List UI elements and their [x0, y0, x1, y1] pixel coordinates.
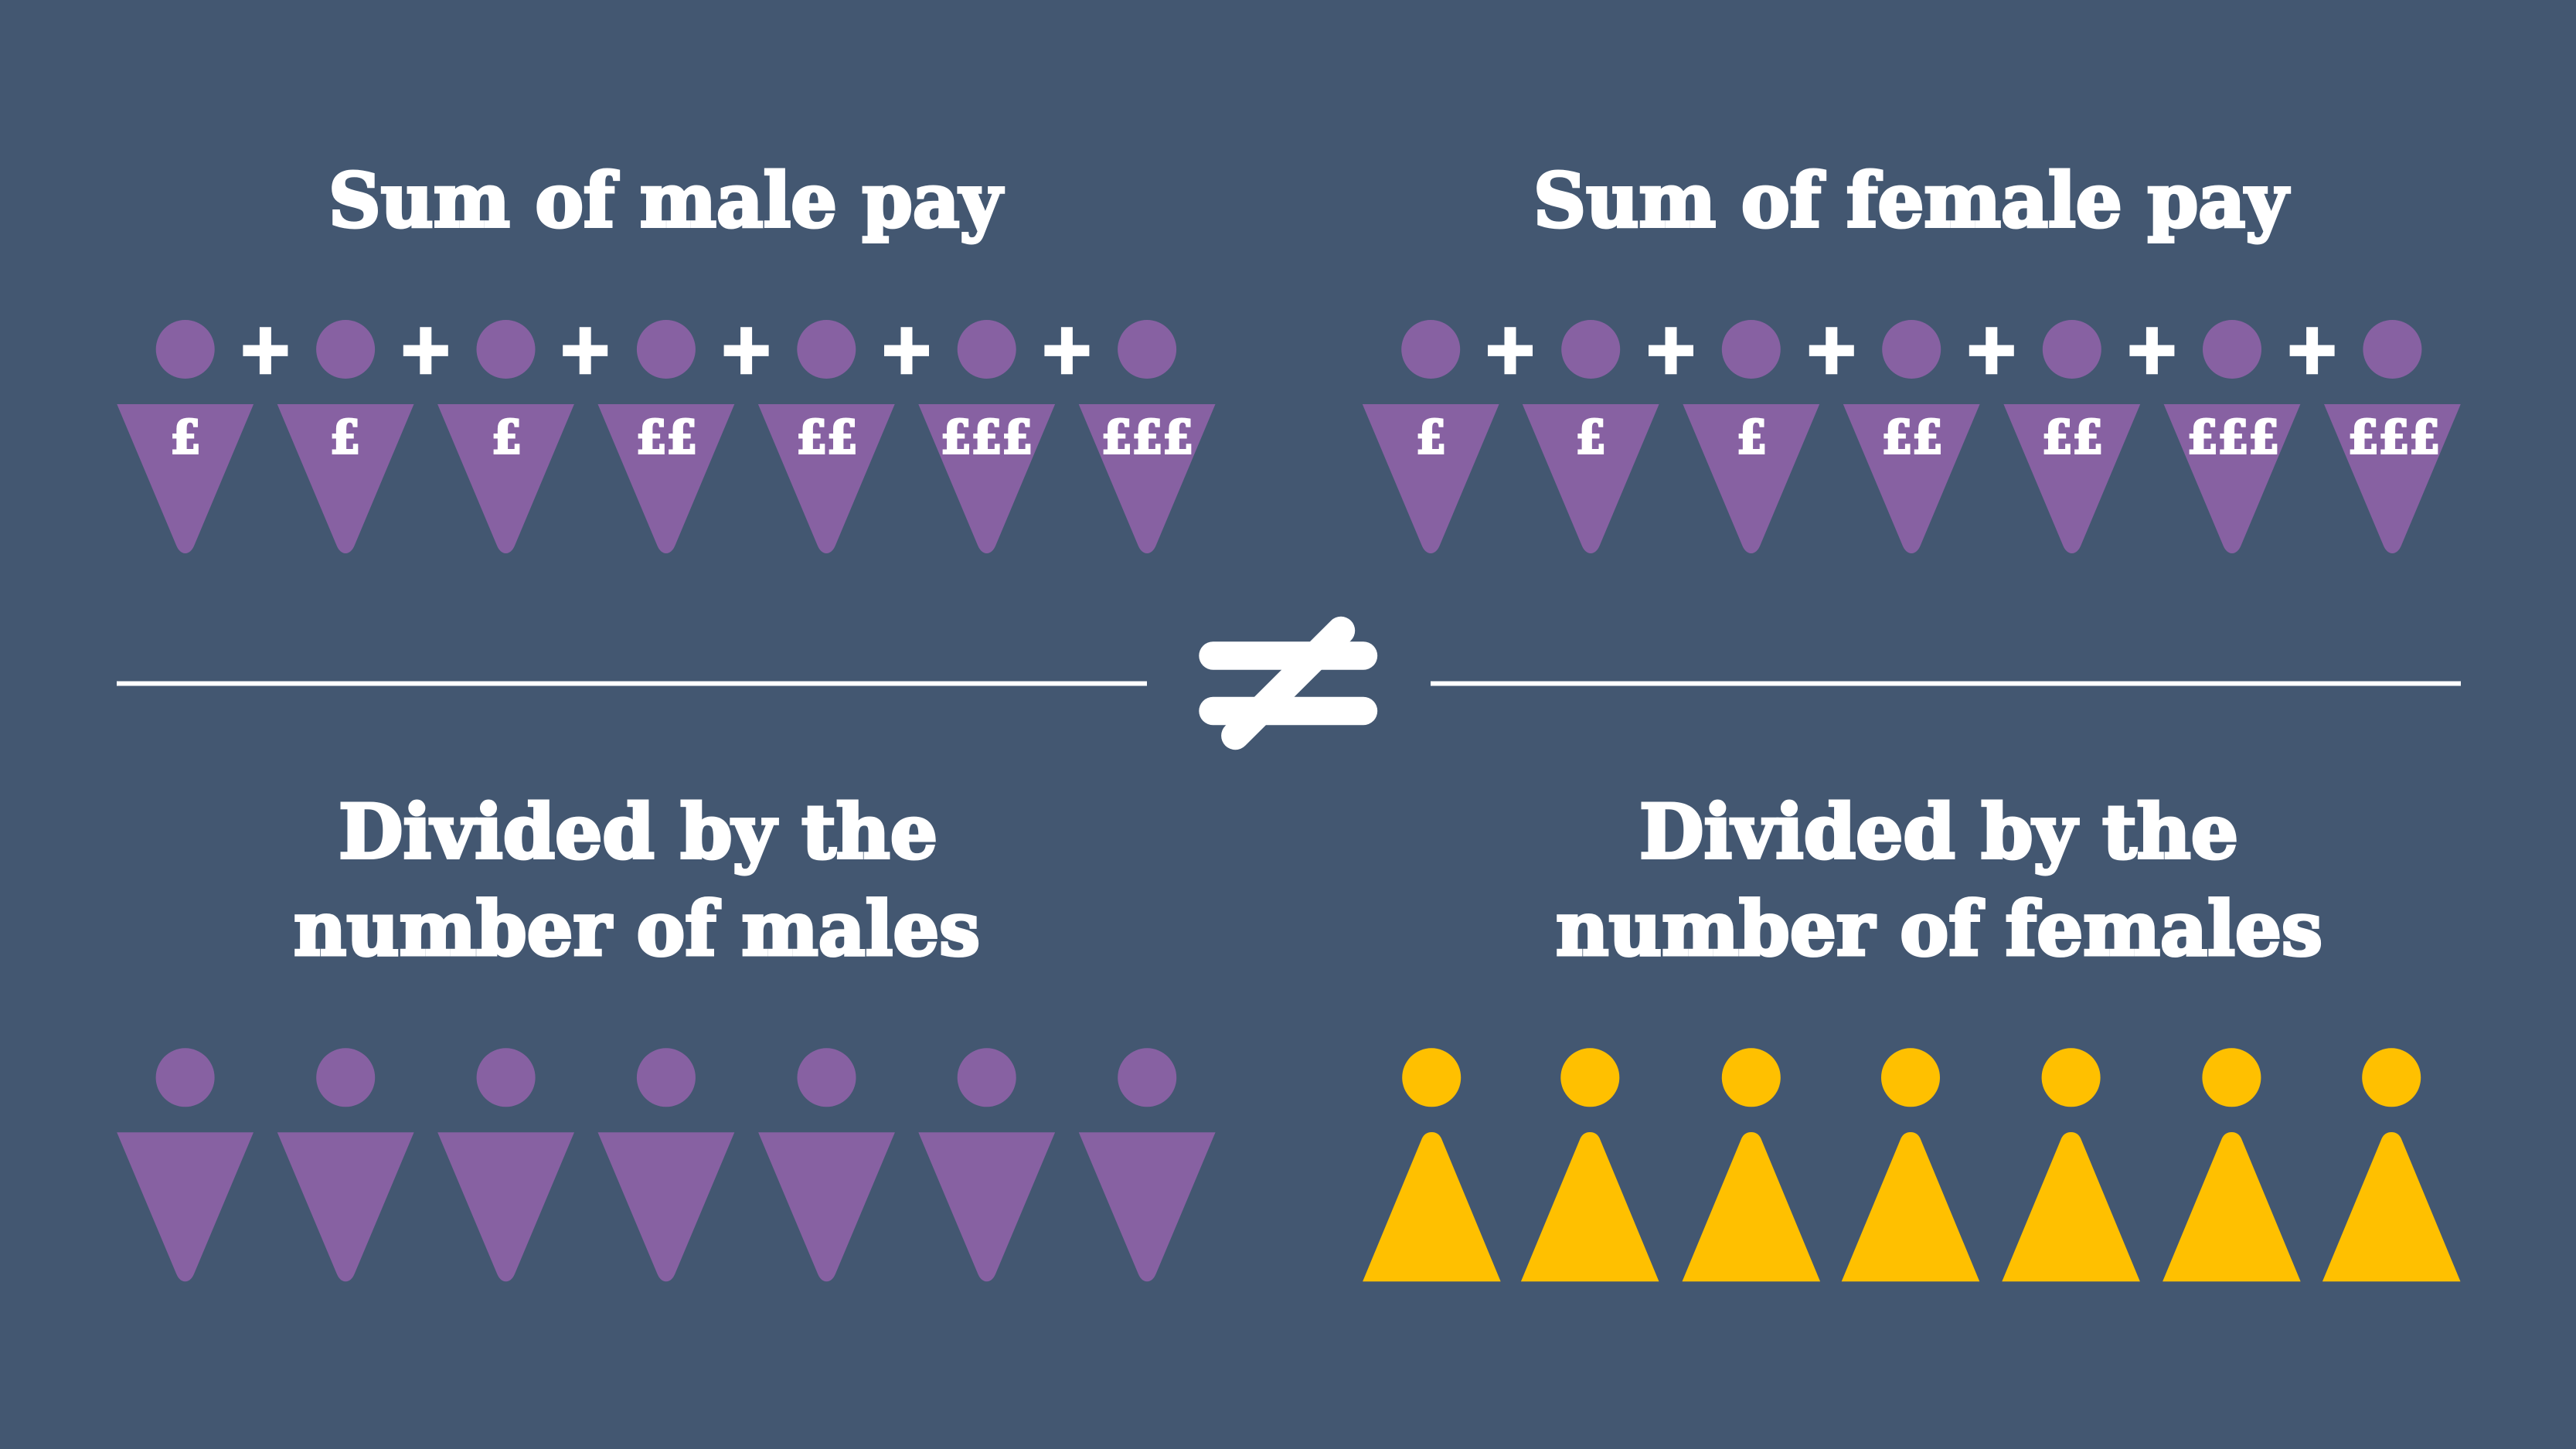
plus sign: [243, 327, 288, 374]
female pay figure 5 with ££: [2003, 320, 2140, 553]
panel: male count figures: [117, 1048, 1216, 1281]
heading: divided by the number of females: number of females: [1556, 886, 2322, 972]
plus sign: [1649, 327, 1693, 374]
female figure 7: [2322, 1048, 2461, 1281]
plus sign: [1969, 327, 2014, 374]
panel: female pay figures: [1363, 320, 2461, 553]
plus sign: [884, 327, 929, 374]
female pay figure 6 with £££: [2164, 320, 2300, 553]
female pay figure 1 with £: [1363, 320, 1499, 553]
heading: divided by the number of males: [294, 788, 980, 972]
heading: divided by the number of males: Divided by the: [339, 788, 938, 876]
plus sign: [2129, 327, 2174, 374]
female pay figure 2 with £: [1523, 320, 1659, 553]
female pay figure 5 with ££: ££: [2042, 411, 2103, 465]
plus sign: [724, 327, 769, 374]
divider left: [117, 682, 1147, 686]
male figure 5 with ££: ££: [796, 411, 858, 465]
male figure 6 with £££: £££: [941, 411, 1033, 465]
male figure 4 with ££: ££: [636, 411, 697, 465]
heading: divided by the number of females: Divided by the: [1639, 788, 2238, 876]
male figure 2: [277, 1048, 414, 1281]
female figure 4: [1842, 1048, 1979, 1281]
plus sign: [1044, 327, 1089, 374]
female pay figure 3 with £: £: [1737, 411, 1767, 465]
male figure 5: [758, 1048, 895, 1281]
male figure 7: [1079, 1048, 1216, 1281]
heading: sum of female pay: Sum of female pay: [1533, 157, 2290, 244]
female pay figure 2 with £: £: [1576, 411, 1606, 465]
heading: divided by the number of males: number of males: [294, 886, 980, 972]
female figure 1: [1363, 1048, 1501, 1281]
male figure 4 with ££: [598, 320, 734, 553]
male figure 2 with £: £: [330, 411, 360, 465]
male figure 7 with £££: £££: [1101, 411, 1193, 465]
heading: sum of male pay: Sum of male pay: [328, 157, 1004, 244]
male figure 3: [437, 1048, 574, 1281]
male figure 2 with £: [277, 320, 414, 553]
female pay figure 1 with £: £: [1416, 411, 1446, 465]
icon: not equal sign: [1213, 631, 1363, 736]
divider right: [1431, 682, 2461, 686]
female pay figure 4 with ££: ££: [1882, 411, 1943, 465]
female figure 2: [1521, 1048, 1659, 1281]
male figure 6 with £££: [918, 320, 1055, 553]
female pay figure 6 with £££: £££: [2187, 411, 2279, 465]
female figure 3: [1682, 1048, 1820, 1281]
plus sign: [2290, 327, 2335, 374]
panel: male pay figures: [117, 320, 1215, 553]
female figure 6: [2163, 1048, 2301, 1281]
male figure 5 with ££: [758, 320, 895, 553]
male figure 1 with £: £: [170, 411, 201, 465]
male figure 1: [117, 1048, 254, 1281]
male figure 3 with £: £: [492, 411, 522, 465]
heading: divided by the number of females: [1556, 788, 2322, 972]
female pay figure 4 with ££: [1843, 320, 1980, 553]
male figure 7 with £££: [1079, 320, 1215, 553]
female pay figure 3 with £: [1683, 320, 1819, 553]
female figure 5: [2002, 1048, 2140, 1281]
male figure 6: [918, 1048, 1055, 1281]
plus sign: [1809, 327, 1854, 374]
male figure 1 with £: [117, 320, 254, 553]
plus sign: [403, 327, 448, 374]
female pay figure 7 with £££: £££: [2348, 411, 2440, 465]
male figure 3 with £: [437, 320, 574, 553]
male figure 4: [598, 1048, 734, 1281]
plus sign: [1488, 327, 1533, 374]
plus sign: [563, 327, 607, 374]
female pay figure 7 with £££: [2324, 320, 2461, 553]
panel: female count figures: [1363, 1048, 2461, 1281]
